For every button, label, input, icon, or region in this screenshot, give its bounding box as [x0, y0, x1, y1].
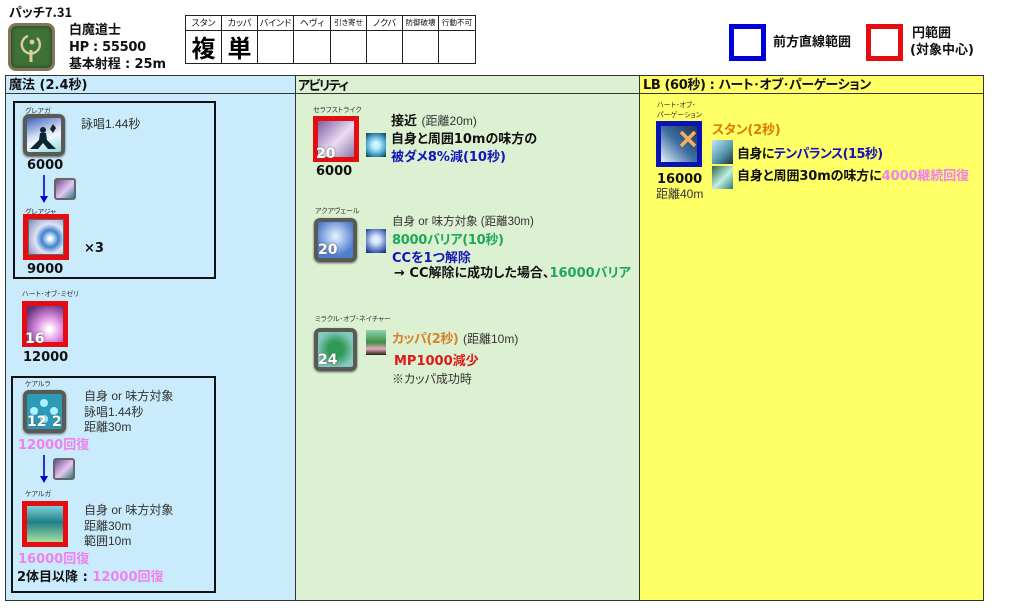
heading: abilities: アビリティ: [298, 75, 347, 94]
label: miracle of nature: ミラクル･オブ･ネイチャー: [315, 314, 391, 324]
icon: glare 4: [23, 214, 69, 260]
legend: circular range: (対象中心): [910, 43, 974, 58]
CC resistance table: スタン: [192, 16, 215, 29]
cure details: 距離30m: [84, 420, 131, 434]
miracle of nature text: カッパ(2秒): [392, 332, 458, 347]
panel: abilities: [295, 75, 640, 601]
icon: seraph strike: [313, 116, 359, 162]
icon: frog status: [366, 330, 386, 355]
regen text: 自身と周囲30mの味方に4000継続回復: [737, 169, 969, 184]
miracle of nature text: MP1000減少: [394, 354, 479, 369]
label: aquaveil: アクアヴェール: [315, 206, 360, 216]
icon: temperance: [712, 140, 733, 164]
cure details: 自身 or 味方対象: [84, 389, 173, 403]
icon: buff status: [54, 178, 76, 200]
CC resistance table: 引き寄せ: [334, 17, 363, 28]
heading: magic: 魔法 (2.4秒): [9, 78, 87, 93]
heal: 12000: 12000回復: [18, 438, 89, 453]
patch label: パッチ7.31: [9, 2, 72, 21]
seraph strike text: [391, 114, 537, 165]
icon: cure upgrade: [22, 501, 68, 547]
CC resistance table: バインド: [260, 16, 291, 29]
aquaveil text: 8000バリア(10秒): [392, 233, 504, 248]
arrow: combo down: [40, 455, 48, 483]
icon: afflatus misery: 16: [25, 331, 44, 347]
legend: frontal line range: 前方直線範囲: [773, 35, 851, 50]
panel: magic: [5, 75, 296, 601]
miracle of nature text: (距離10m): [463, 332, 518, 346]
job name and stats: HP : 55500: [69, 40, 146, 55]
seraph strike text: 被ダメ8%減(10秒): [391, 150, 506, 165]
CC resistance table: [185, 15, 476, 64]
icon: aquaveil status: [366, 229, 386, 253]
label: limit break skill: ハート･オブ･: [657, 100, 696, 110]
CC resistance table: 行動不可: [442, 17, 472, 28]
CC resistance table: 単: [228, 30, 252, 64]
icon: damage reduction: [366, 133, 386, 157]
job name and stats: [69, 22, 166, 72]
job name and stats: 白魔道士: [69, 23, 121, 38]
aquaveil text: → CC解除に成功した場合、16000バリア: [394, 266, 631, 281]
multiplier: ×3: [84, 241, 104, 256]
CC resistance table: ノクバ: [373, 16, 396, 29]
aquaveil text: [392, 215, 631, 281]
CC resistance table: 複: [192, 30, 216, 64]
icon: cure: 2: [52, 414, 62, 430]
icon: aquaveil: [314, 218, 357, 262]
seraph strike text: 自身と周囲10mの味方の: [391, 132, 537, 147]
damage: 6000: 6000: [316, 164, 352, 179]
icon: cure: [23, 390, 66, 433]
damage: 16000: 16000: [657, 172, 702, 187]
cure details: [84, 389, 173, 434]
range: 40m: 距離40m: [656, 187, 703, 201]
icon: regen: [712, 166, 733, 189]
icon: limit break skill: [656, 121, 702, 167]
cure details: 詠唱1.44秒: [84, 405, 143, 419]
label: glare 3: グレアガ: [25, 106, 51, 116]
icon: seraph strike: 20: [316, 146, 335, 162]
aquaveil text: 自身 or 味方対象 (距離30m): [392, 216, 534, 228]
heading: limit break: LB (60秒) : ハート･オブ･パーゲーション: [643, 78, 871, 93]
heal: additional targets: 2体目以降 : 12000回復: [17, 570, 164, 585]
miracle of nature text: ※カッパ成功時: [392, 372, 472, 386]
aquaveil text: CCを1つ解除: [392, 251, 471, 266]
icon: miracle of nature: [314, 328, 357, 371]
seraph strike text: 接近 (距離20m): [391, 114, 477, 129]
label: seraph strike: セラフストライク: [313, 105, 362, 115]
label: glare 4: グレアジャ: [25, 207, 56, 217]
CC resistance table: カッパ: [228, 16, 251, 29]
legend: frontal line range: [729, 24, 851, 61]
icon: buff status: [53, 458, 75, 480]
heal: 16000: 16000回復: [18, 552, 89, 567]
cure upgrade details: 距離30m: [84, 519, 131, 533]
label: limit break skill: [657, 100, 702, 120]
legend: circular range: [866, 24, 974, 61]
label: cure upgrade: ケアルガ: [25, 489, 51, 499]
icon: glare 3: [23, 114, 65, 156]
icon: afflatus misery: [22, 301, 68, 347]
job name and stats: 基本射程 : 25m: [69, 57, 166, 72]
damage: 12000: 12000: [23, 350, 68, 365]
icon: cure: 12: [27, 414, 46, 430]
icon: aquaveil: 20: [318, 242, 337, 258]
legend: circular range: 円範囲: [912, 26, 951, 41]
damage: 9000: 9000: [27, 262, 63, 277]
arrow: combo down: [40, 175, 48, 203]
group: heal combo: [11, 376, 216, 593]
icon: miracle of nature: 24: [318, 352, 337, 368]
miracle of nature text: [392, 332, 518, 386]
cure upgrade details: [84, 503, 173, 548]
label: cure: ケアルラ: [25, 379, 51, 389]
cure upgrade details: 範囲10m: [84, 534, 131, 548]
stun text: スタン(2秒): [712, 123, 781, 138]
cast time: 詠唱1.44秒: [81, 117, 140, 131]
temperance text: 自身にテンパランス(15秒): [737, 147, 883, 162]
CC resistance table: ヘヴィ: [300, 16, 324, 29]
cure upgrade details: 自身 or 味方対象: [84, 503, 173, 517]
icon: white mage job: [8, 23, 55, 71]
panel: limit break: [639, 75, 984, 601]
damage: 6000: 6000: [27, 158, 63, 173]
label: limit break skill: パーゲーション: [657, 110, 702, 120]
group: glare combo: [13, 101, 216, 279]
label: afflatus misery: ハート･オブ･ミゼリ: [22, 289, 79, 299]
CC resistance table: 防御破壊: [406, 17, 436, 28]
